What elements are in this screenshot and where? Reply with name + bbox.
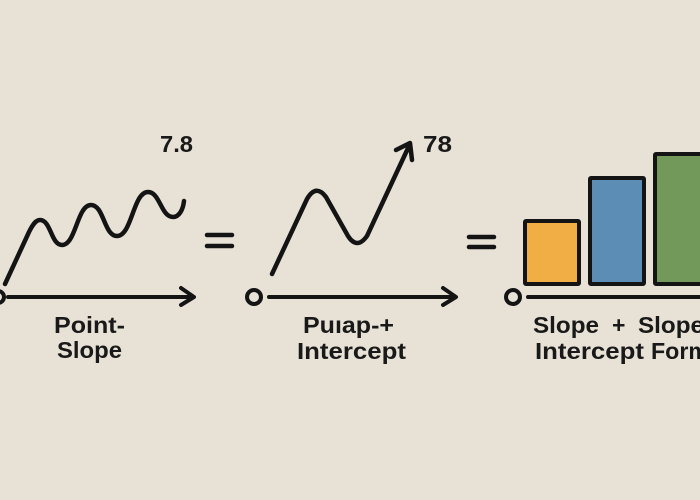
value: 7.8: 7.8 [160,131,193,157]
wavy line chart [5,192,184,284]
orange bar [525,221,579,284]
label: Point-Slope [54,312,125,363]
blue bar [590,178,644,284]
label: Slope + Slope Intercept Form: Slope [638,312,700,338]
label: Point-Slope: Point- [54,312,125,338]
label: Puıap-+ Intercept: Intercept [297,338,406,364]
rising line with arrow [272,143,412,274]
axis arrow [8,288,194,305]
panel: intercept [247,131,456,364]
value: 78: 78 [423,131,452,157]
origin circle [506,290,520,304]
panel: bar chart [506,154,700,364]
equals sign 2 [469,237,494,247]
label: Point-Slope: Slope [57,337,122,363]
panel: point-slope [0,131,194,363]
label: Slope + Slope Intercept Form: Slope [533,312,599,338]
label: Slope + Slope Intercept Form [533,312,700,364]
axis line [528,295,700,299]
label: Slope + Slope Intercept Form: Intercept [535,338,644,364]
equals sign 1 [207,235,232,246]
origin circle [0,291,4,303]
label: Slope + Slope Intercept Form: + [612,312,625,338]
green bar [655,154,700,284]
label: Puıap-+ Intercept [297,312,406,364]
axis arrow [269,288,456,305]
origin circle [247,290,261,304]
label: Puıap-+ Intercept: Puıap-+ [303,312,394,338]
